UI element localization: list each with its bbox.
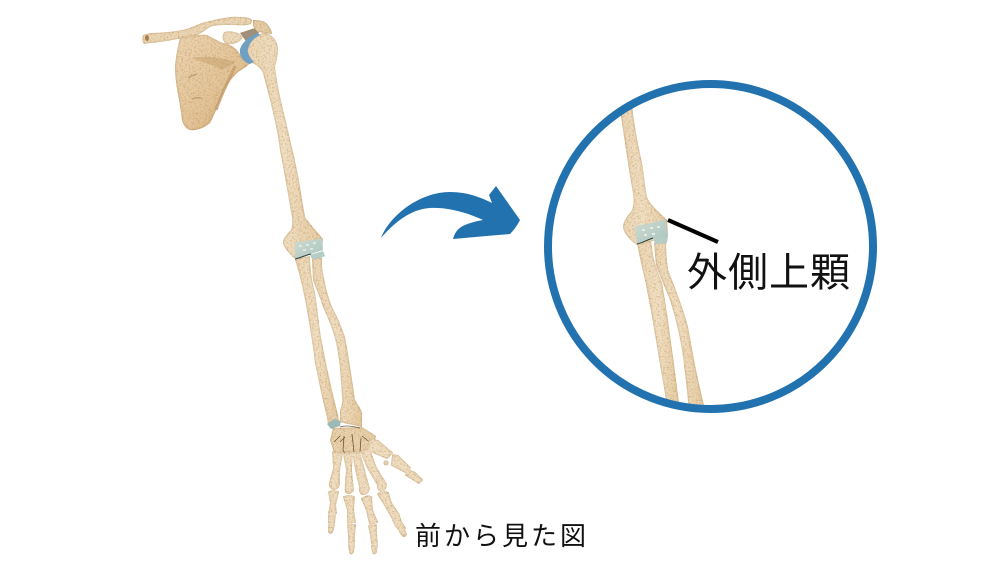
carpals [330,427,376,453]
middle finger [353,452,377,554]
scapula [175,35,250,130]
inset ring [548,84,873,409]
humerus [246,33,323,258]
thumb [368,439,422,483]
hand skeleton [329,426,422,554]
inset humerus [620,104,668,245]
inset radius [654,243,705,410]
radial head cartilage [310,251,325,259]
acromion and coracoid [223,20,272,44]
ulna [295,256,339,425]
index finger [361,449,406,536]
infographic canvas [142,16,877,554]
caption: 前から見た図 [415,521,589,551]
inset ulna [637,241,680,410]
shoulder cartilage [240,33,260,64]
little finger [329,452,342,533]
elbow cartilage [295,238,323,259]
magnified elbow inset [548,84,873,410]
ring finger [344,453,355,554]
inset bones [620,104,705,410]
inset cartilage [635,219,668,244]
wrist cartilage [327,419,341,429]
metacarpals and phalanges [329,439,422,554]
label: lateral epicondyle: 外側上顆 [687,251,851,295]
leader line [668,220,718,242]
clavicle [142,17,252,44]
full arm skeleton, front view [142,17,422,554]
radius [312,258,362,427]
carpal joint lines [334,426,372,454]
curved arrow [381,186,520,239]
